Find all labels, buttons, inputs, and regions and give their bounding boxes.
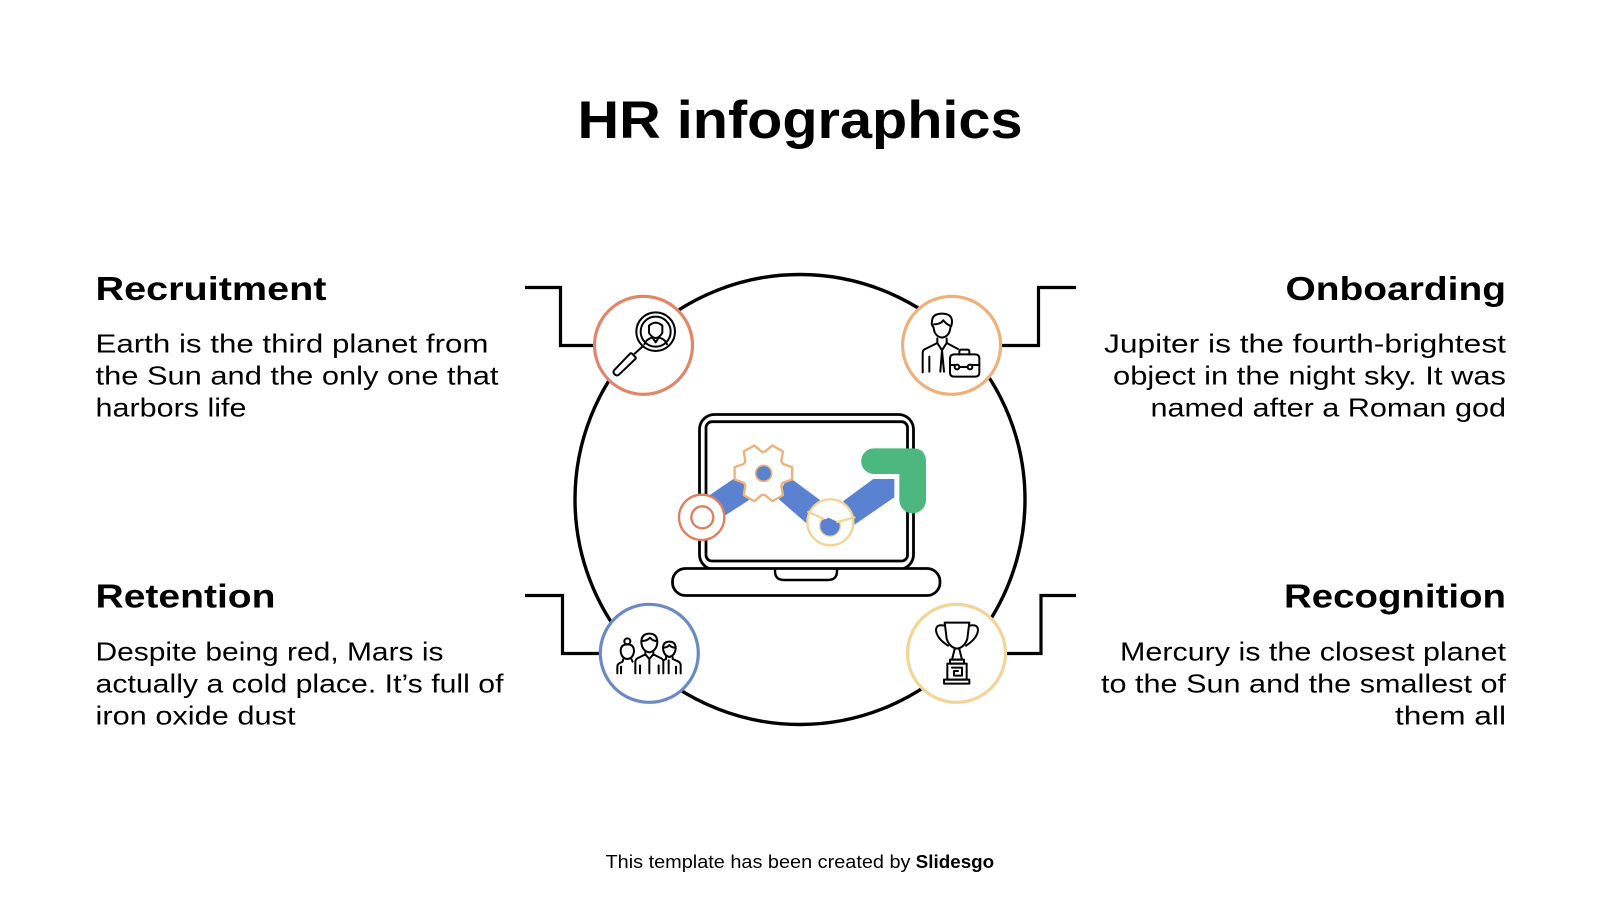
icon badge: team of people bbox=[600, 604, 698, 702]
big central circle bbox=[575, 274, 1025, 724]
laptop base bbox=[672, 568, 940, 596]
laptop screen bbox=[706, 422, 908, 561]
body: onboarding: named after a Roman god bbox=[1150, 393, 1506, 423]
heading: recruitment: Recruitment bbox=[96, 270, 327, 307]
body: retention bbox=[96, 636, 504, 730]
heading: recognition: Recognition bbox=[1284, 578, 1506, 615]
body: onboarding: Jupiter is the fourth-brightest bbox=[1104, 329, 1507, 359]
red target node bbox=[679, 495, 724, 540]
body: recognition: them all bbox=[1395, 700, 1506, 730]
block: recognition bbox=[1101, 578, 1507, 730]
growth chart bbox=[679, 445, 926, 545]
icon badge: magnifier over person bbox=[594, 296, 692, 394]
orange gear node bbox=[735, 445, 792, 501]
body: onboarding: object in the night sky. It was bbox=[1113, 361, 1506, 391]
connector: recognition bbox=[1006, 596, 1076, 654]
icon badge: trophy bbox=[908, 604, 1006, 702]
yellow donut node bbox=[807, 499, 854, 545]
title: HR infographics bbox=[578, 91, 1022, 150]
laptop illustration bbox=[672, 414, 940, 596]
block: retention bbox=[96, 578, 504, 730]
body: retention: Despite being red, Mars is bbox=[96, 636, 444, 666]
body: onboarding bbox=[1104, 329, 1507, 423]
blue trend line bbox=[708, 476, 894, 527]
body: recruitment: harbors life bbox=[96, 393, 246, 423]
body: retention: actually a cold place. It’s full of bbox=[96, 668, 504, 698]
body: recognition: to the Sun and the smallest of bbox=[1101, 668, 1507, 698]
connector: retention bbox=[525, 596, 600, 654]
laptop notch bbox=[775, 568, 837, 580]
block: recruitment bbox=[96, 270, 499, 423]
block: onboarding bbox=[1104, 270, 1507, 423]
body: recruitment: Earth is the third planet from bbox=[96, 329, 488, 359]
body: recruitment bbox=[96, 329, 499, 423]
connector: recruitment bbox=[525, 288, 594, 346]
green arrow head bbox=[861, 448, 926, 513]
heading: retention: Retention bbox=[96, 578, 276, 615]
footer credit: This template has been created by bbox=[606, 852, 910, 872]
body: recognition: Mercury is the closest planet bbox=[1120, 636, 1507, 666]
icon badge: employee with briefcase bbox=[903, 296, 1001, 394]
connector: onboarding bbox=[1001, 288, 1076, 346]
body: retention: iron oxide dust bbox=[96, 700, 296, 730]
body: recruitment: the Sun and the only one that bbox=[96, 361, 499, 391]
laptop lid bbox=[700, 414, 914, 570]
footer credit: Slidesgo bbox=[916, 852, 994, 872]
heading: onboarding: Onboarding bbox=[1286, 270, 1506, 307]
body: recognition bbox=[1101, 636, 1507, 730]
